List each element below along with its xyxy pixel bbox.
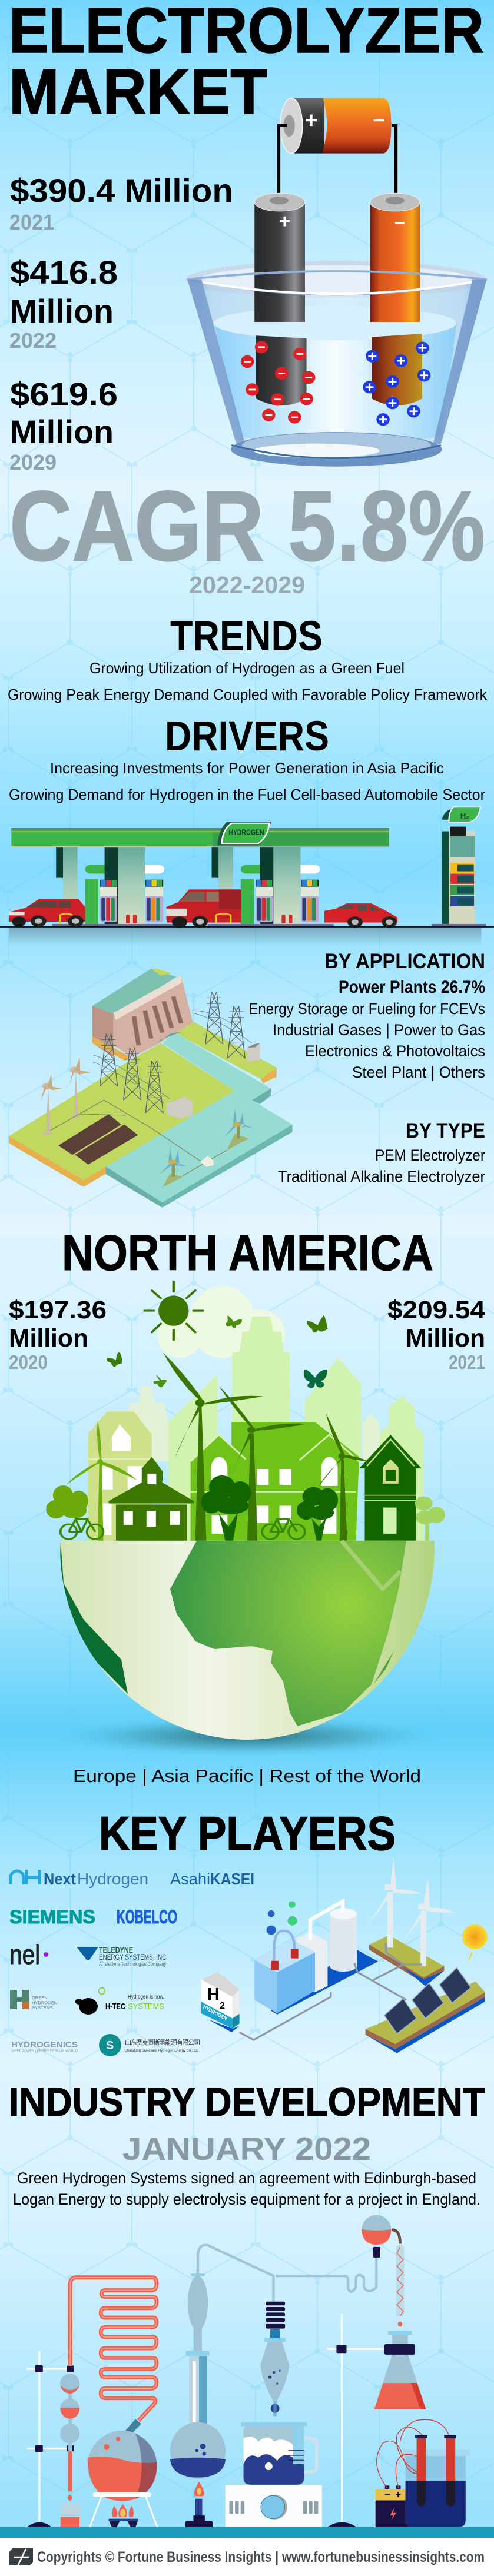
cylinder and pipe (310, 1902, 357, 1972)
logo: Siemens: SIEMENS (9, 1906, 95, 1927)
blue ground (271, 1949, 378, 2015)
drivers: Increasing Investments for Power Generation in Asia Pacific (50, 759, 444, 777)
other regions: Europe | Asia Pacific | Rest of the World (73, 1766, 421, 1786)
stat: 2020: 2020 (9, 1351, 48, 1373)
globe (60, 1541, 435, 1740)
pipes (240, 1943, 422, 2040)
hot plate (226, 2485, 322, 2527)
distillation column (170, 2245, 376, 2479)
cloud (157, 1286, 285, 1358)
drivers: DRIVERS (165, 713, 329, 760)
main house (191, 1422, 359, 1541)
by application: Steel Plant | Others (352, 1063, 485, 1081)
continents (170, 1541, 406, 1726)
logo: Green Hydrogen Systems (10, 1990, 57, 2010)
funnel (260, 2302, 289, 2416)
logo: Saikesaisi: Shandong Saikesaisi Hydrogen Energy Co., Ltd. (125, 2049, 200, 2053)
right stand (327, 2314, 384, 2527)
bubbles (267, 1901, 297, 1935)
wind turbines on land (40, 1058, 91, 1135)
logo: Green Hydrogen Systems: GREEN (32, 1995, 48, 2000)
top sphere and condenser (362, 2215, 404, 2316)
H2 cube (201, 1972, 240, 2032)
stat: 2021 value (9, 172, 233, 234)
by application: Electronics & Photovoltaics (305, 1042, 485, 1060)
logo: Hydrogenics: SHIFT POWER | ENERGIZE YOUR WORLD (11, 2050, 78, 2053)
positive ions (363, 341, 430, 426)
title: MARKET (9, 56, 267, 128)
land (9, 1021, 277, 1187)
logo: Asahi Kasei: KASEI (210, 1870, 254, 1888)
erlenmeyer flask (374, 2322, 426, 2409)
canopy (11, 828, 389, 847)
hydrogen sign: HYDROGEN (228, 829, 264, 837)
van (166, 889, 241, 928)
reflection (9, 927, 481, 946)
logo: H-TEC Systems: Hydrogen is now. (128, 1994, 164, 2000)
stat: 2029 value: Million (10, 413, 114, 450)
logo: H-TEC Systems (75, 1988, 164, 2015)
dark right house (359, 1435, 422, 1541)
battery (279, 98, 396, 198)
drivers (9, 713, 485, 803)
H2 cube labels: 2 (220, 2001, 225, 2011)
hydrogen filling station illustration (0, 807, 494, 946)
by type (278, 1119, 485, 1185)
hydrogen sign (217, 822, 271, 845)
trends: Growing Utilization of Hydrogen as a Green Fuel (89, 659, 405, 677)
logo: NextHydrogen: Next (44, 1870, 76, 1888)
wind turbines (163, 1353, 369, 1541)
left stand (26, 2351, 74, 2527)
small spheres (60, 2374, 79, 2491)
stations (52, 840, 334, 927)
stat: 2022 value: 2022 (9, 328, 57, 353)
stat: 2020: Million (9, 1324, 88, 1352)
footer (0, 2538, 494, 2576)
glass front (187, 271, 487, 467)
solar platform (366, 1982, 485, 2053)
H2 sign tower: H₂ (460, 812, 469, 820)
glass back (186, 261, 487, 298)
H2 cube labels (202, 1985, 228, 2022)
by application: BY APPLICATION (324, 950, 485, 973)
hydrogen production illustration (201, 1857, 488, 2053)
stat: 2029 value: 2029 (9, 450, 57, 474)
by type: Traditional Alkaline Electrolyzer (278, 1168, 485, 1185)
dam (92, 969, 193, 1061)
skyline (129, 1317, 424, 1541)
small beaker (61, 2495, 81, 2527)
bicycles (61, 1519, 305, 1539)
white turbines (369, 1857, 455, 1966)
stat: 2022 value: $416.8 (10, 254, 118, 291)
stat: 2022 value: Million (10, 292, 114, 330)
drivers: Growing Demand for Hydrogen in the Fuel Cell-based Automobile Sector (9, 786, 485, 803)
logo: Green Hydrogen Systems: HYDROGEN (32, 2000, 57, 2006)
trees (46, 1475, 445, 1541)
stat: 2022 value (9, 254, 118, 353)
logo: NextHydrogen (11, 1870, 148, 1888)
logo: H-TEC Systems: H-TEC (105, 2002, 125, 2012)
tripod and burner (89, 2492, 157, 2527)
beaker with foam (241, 2422, 317, 2485)
H2 cube labels: H (207, 1985, 220, 2004)
stat: 2021: $209.54 (387, 1296, 485, 1324)
substations (166, 1043, 260, 1119)
pale house (88, 1411, 152, 1541)
globe details (59, 1541, 400, 1694)
stat: 2029 value (9, 375, 118, 474)
illustration: battery and electrolysis beaker (186, 98, 487, 467)
stat: 2021: Million (406, 1324, 485, 1352)
by type: BY TYPE (406, 1119, 485, 1142)
logo: Kobelco: KOBELCO (117, 1906, 177, 1927)
sun (143, 1281, 204, 1341)
CAGR: 2022-2029 (189, 571, 305, 599)
stat: 2021 value: 2021 (9, 210, 54, 234)
by application (248, 950, 485, 1081)
logo: NextHydrogen: Hydrogen (77, 1870, 148, 1888)
junction box (200, 1156, 214, 1167)
logo: Teledyne: A Teledyne Technologies Company (99, 1961, 166, 1967)
left turbine (66, 1421, 137, 1541)
left electrode (254, 193, 305, 322)
big red flask (88, 2419, 157, 2501)
trends (8, 613, 488, 703)
renewable energy isometric illustration (9, 969, 292, 1208)
logo: H-TEC Systems: SYSTEMS (128, 2002, 164, 2012)
stat: 2029 value: $619.6 (10, 375, 118, 413)
water (105, 1033, 292, 1208)
sedan (324, 903, 397, 928)
transmission towers (93, 992, 252, 1113)
stat: 2021: 2021 (449, 1351, 485, 1373)
teal floor bar (0, 2527, 494, 2538)
development description (13, 2169, 480, 2208)
logo: Saikesaisi (99, 2034, 200, 2056)
stat: 2020: $197.36 (9, 1296, 107, 1324)
electrolysis beaker (377, 2419, 470, 2527)
logo: Saikesaisi: S (106, 2039, 114, 2052)
solar panels (384, 1967, 471, 2034)
green city illustration (46, 1281, 445, 1541)
stat: 2021 (387, 1296, 485, 1373)
solar panels (58, 1114, 138, 1165)
logo: Teledyne: TELEDYNE (99, 1945, 133, 1955)
battery (376, 2485, 410, 2527)
white unit (296, 1932, 327, 1992)
dark small house (109, 1457, 194, 1541)
H2 sign tower (432, 807, 486, 927)
logo: Saikesaisi: 山东赛克赛斯氢能源有限公司 (125, 2038, 200, 2046)
logo: Asahi Kasei: Asahi (170, 1870, 210, 1888)
logo: Asahi Kasei (170, 1870, 254, 1888)
logo: Teledyne (77, 1945, 168, 1967)
logo: nel: nel (9, 1939, 40, 1970)
turbine platform (369, 1935, 444, 1986)
right electrode (370, 193, 420, 322)
by application: Industrial Gases | Power to Gas (273, 1021, 485, 1039)
logo: Hydrogenics: HYDROGENICS (11, 2040, 78, 2050)
stat: 2021 value: $390.4 Million (10, 172, 233, 209)
tidal turbines (159, 1109, 253, 1188)
cables (51, 1100, 227, 1176)
logo: Teledyne: ENERGY SYSTEMS, INC. (99, 1952, 168, 1962)
water tank (254, 1931, 315, 2013)
sun (462, 1924, 488, 1963)
globe shadow (47, 1715, 447, 1757)
by type: PEM Electrolyzer (375, 1146, 485, 1164)
stat: 2020 (9, 1296, 107, 1373)
SUV (9, 899, 85, 927)
north america heading: NORTH AMERICA (62, 1225, 433, 1281)
coil tube (70, 2278, 157, 2421)
bunsen burner (185, 2482, 213, 2527)
H2 cube labels: HYDROGEN (202, 2004, 228, 2022)
logo: Green Hydrogen Systems: SYSTEMS (32, 2005, 53, 2010)
title (9, 0, 484, 128)
ground line (0, 926, 494, 928)
laboratory illustration (26, 2215, 470, 2527)
date: JANUARY 2022 (122, 2130, 371, 2167)
negative ions (241, 341, 316, 424)
trends: TRENDS (170, 613, 323, 660)
butterflies (107, 1315, 327, 1388)
key players heading: KEY PLAYERS (99, 1807, 396, 1860)
